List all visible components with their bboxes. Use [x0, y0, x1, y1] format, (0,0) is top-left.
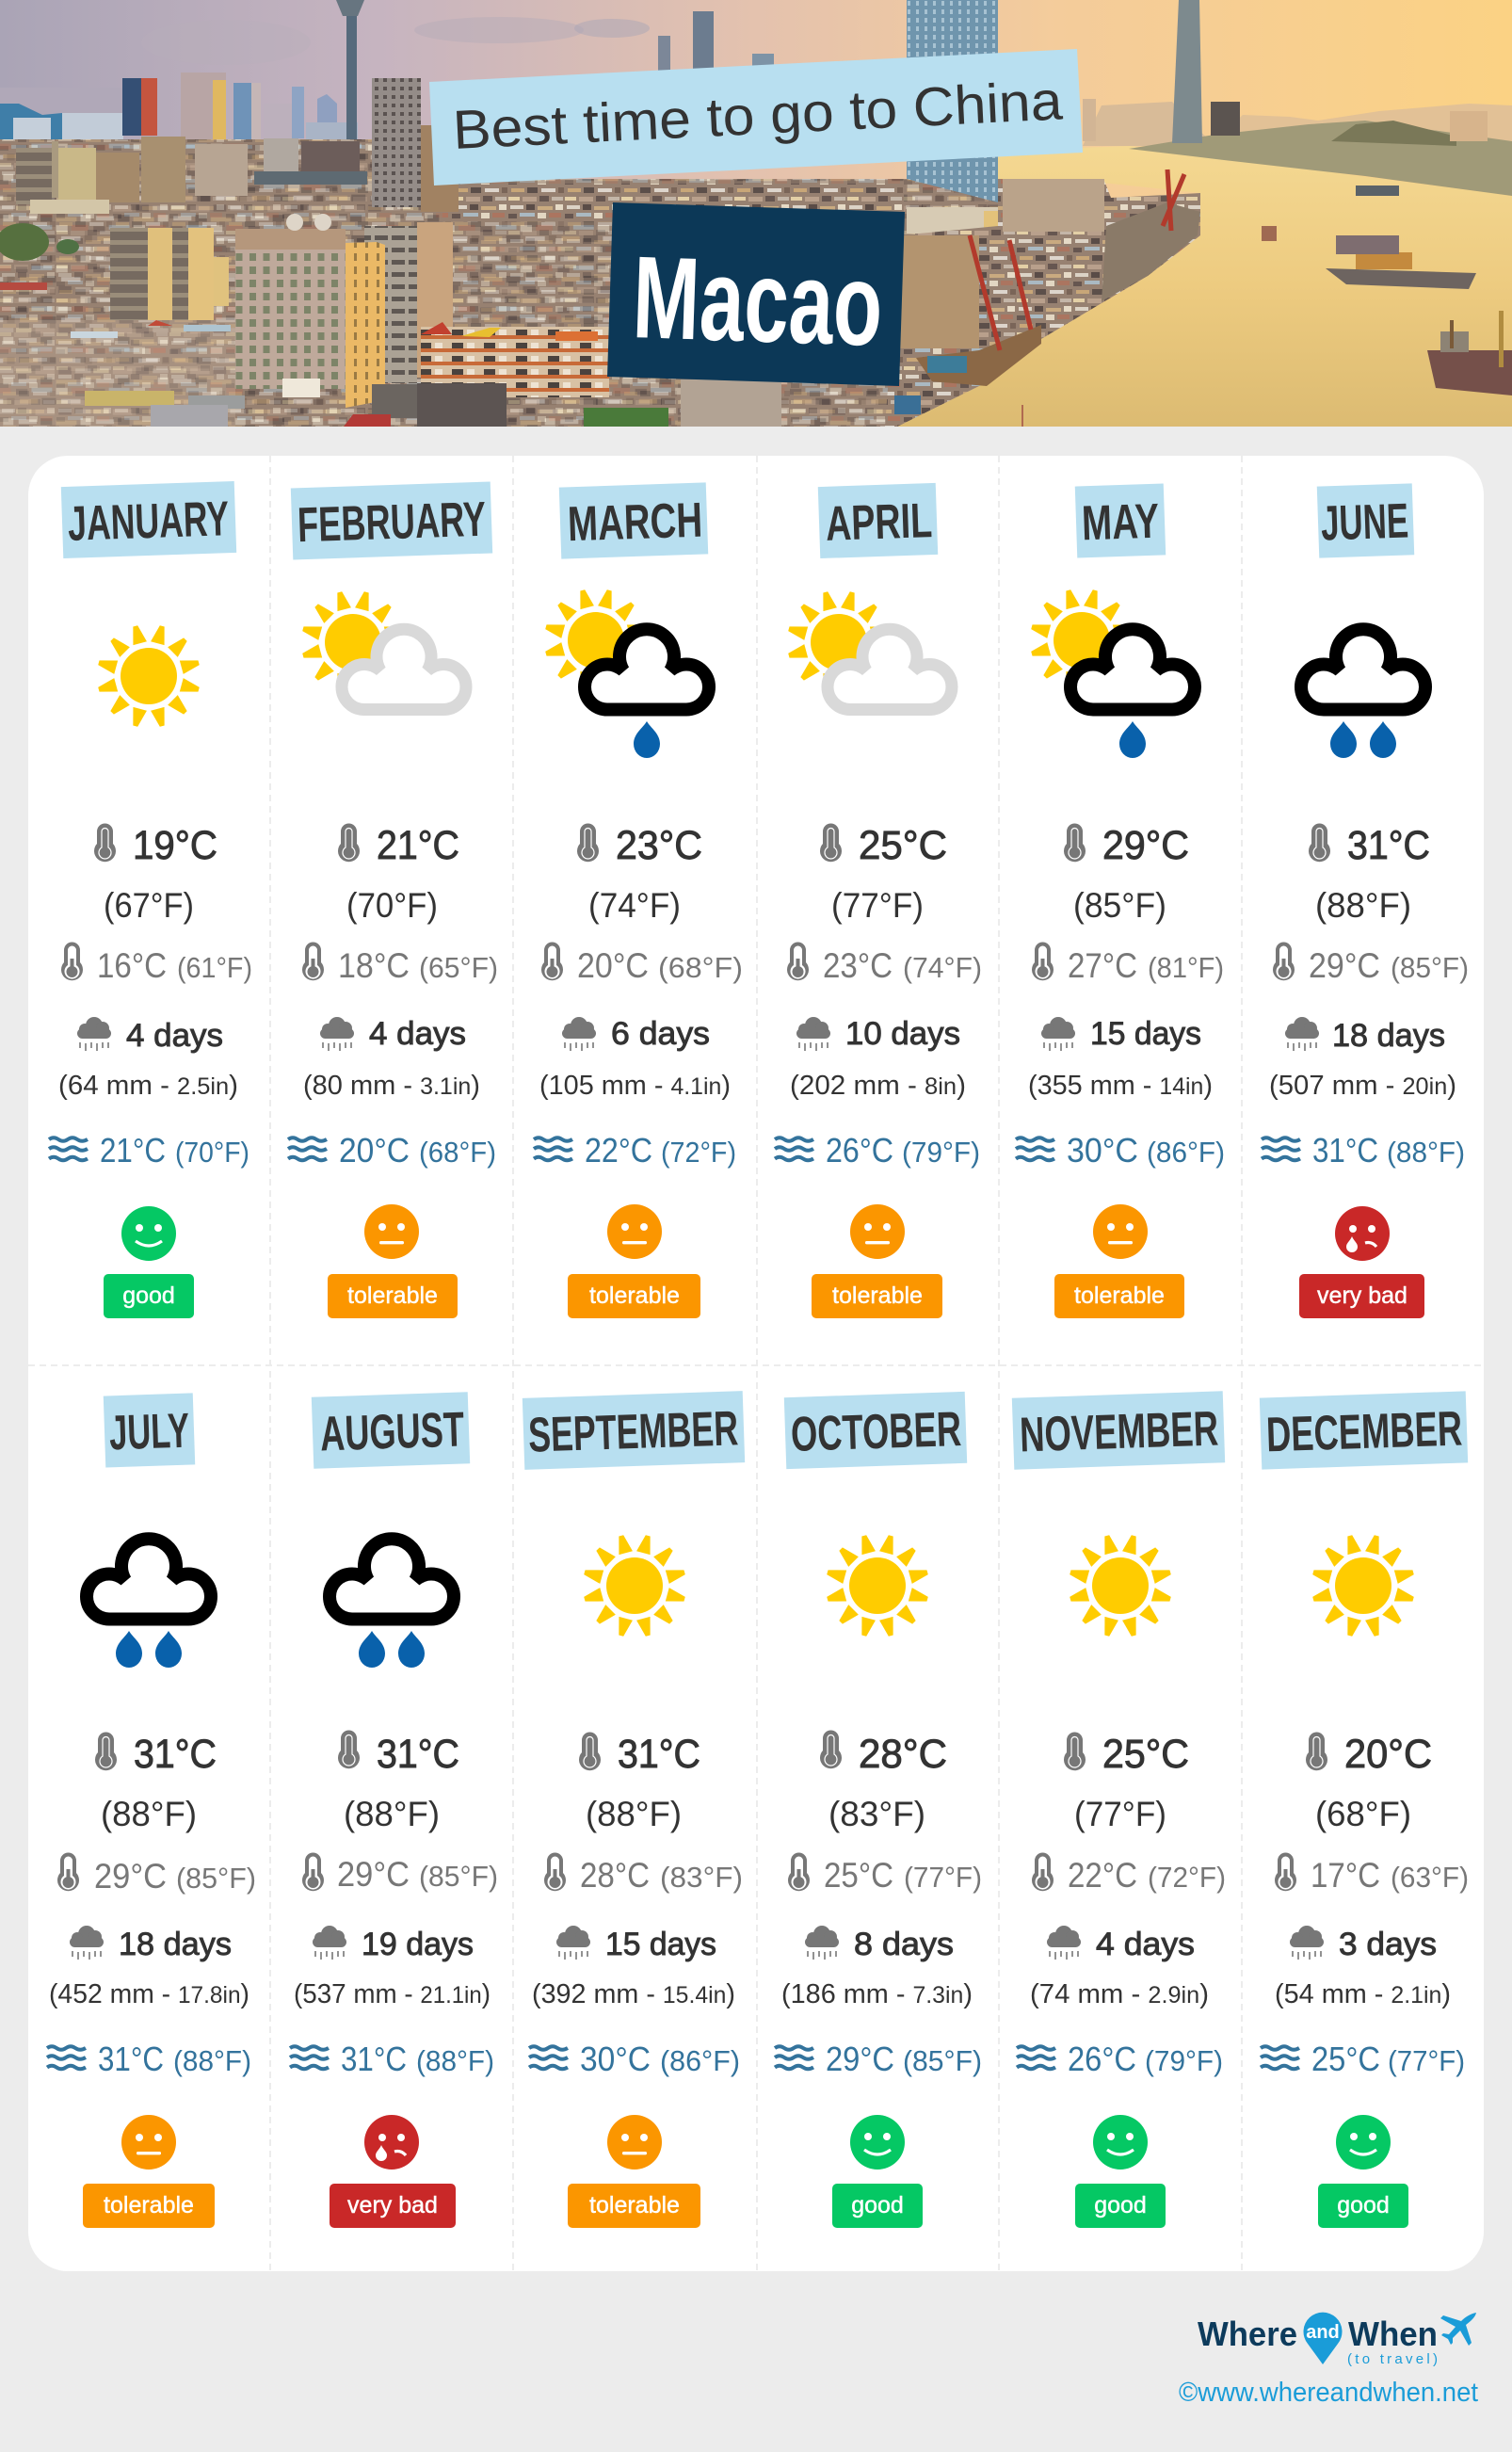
high temperature: 31°C [618, 1732, 700, 1777]
docks and boats on the near bank [885, 179, 1200, 427]
panel: August [290, 1392, 498, 2228]
rainfall: (54 mm - 2.1in) [1275, 1979, 1451, 2009]
sea temperature: (79°F) [1145, 2044, 1223, 2077]
rainy days [77, 1017, 223, 1054]
location banner: Macao [607, 202, 905, 386]
icon: black cloud, two drops [87, 1539, 211, 1668]
icon: sun [826, 1534, 929, 1637]
heading: JUNE [1317, 483, 1414, 558]
face: tolerable [1093, 1204, 1148, 1259]
high temperature: 31°C [377, 1732, 459, 1777]
rating badge: very bad: very bad [1317, 1282, 1407, 1309]
sea temperature: (88°F) [173, 2044, 251, 2077]
header photo: Macao skyline and river [0, 0, 1512, 427]
heading: SEPTEMBER: SEPTEMBER [527, 1401, 739, 1463]
rating badge: good: good [122, 1282, 175, 1309]
sea temperature: (88°F) [416, 2044, 494, 2077]
sea temperature: (70°F) [175, 1136, 249, 1169]
high temperature: 28°C [859, 1732, 947, 1777]
low temperature [1032, 942, 1224, 985]
rating badge: very bad [1299, 1274, 1424, 1318]
low temperature: 27°C [1068, 946, 1137, 985]
face: tolerable [364, 1204, 419, 1259]
high temperature [820, 1731, 947, 1777]
heading: MARCH: MARCH [567, 493, 703, 552]
face: good [1336, 2115, 1391, 2170]
face: good [1093, 2115, 1148, 2170]
city base [0, 139, 998, 427]
high temperature [820, 823, 947, 868]
sea temperature: 31°C [341, 2040, 407, 2078]
high temperature: 20°C [1344, 1732, 1432, 1777]
panel: May [1016, 483, 1225, 1318]
low temperature: (81°F) [1148, 951, 1224, 984]
low temperature: (61°F) [177, 951, 252, 984]
sea temperature: 25°C [1311, 2040, 1380, 2078]
heading: MAY [1075, 483, 1166, 558]
heading: OCTOBER [784, 1392, 967, 1469]
rainy days: 18 days [119, 1927, 232, 1962]
rainy days [320, 1016, 466, 1052]
sea temperature: 21°C [100, 1131, 166, 1170]
sea temperature: (79°F) [902, 1136, 980, 1169]
high temperature: 25°C [859, 823, 947, 868]
icon: black cloud, two drops [330, 1539, 454, 1668]
sea temperature: (68°F) [419, 1136, 496, 1169]
rainy days [556, 1926, 716, 1962]
low temperature [302, 942, 498, 985]
heading: NOVEMBER: NOVEMBER [1019, 1402, 1219, 1462]
high temperature Fahrenheit: (88°F) [344, 1795, 440, 1833]
low temperature: 23°C [823, 946, 893, 985]
heading: JULY [104, 1393, 195, 1468]
rainfall: (186 mm - 7.3in) [781, 1979, 973, 2009]
sea temperature: (85°F) [903, 2044, 982, 2077]
rating badge: tolerable: tolerable [832, 1282, 923, 1309]
high temperature: 23°C [616, 823, 702, 868]
low temperature [302, 1853, 498, 1894]
low temperature: 25°C [824, 1856, 893, 1895]
high temperature Fahrenheit: (77°F) [831, 886, 924, 925]
rainfall: (452 mm - 17.8in) [49, 1979, 249, 2009]
rating badge: good: good [851, 2192, 904, 2218]
sea temperature [534, 1131, 736, 1170]
rainy days [1047, 1926, 1195, 1962]
high temperature: 25°C [1102, 1732, 1189, 1777]
low temperature: 18°C [338, 946, 410, 985]
logo: Where and When (to travel) [1198, 2313, 1476, 2367]
high temperature: 19°C [133, 823, 217, 868]
heading: APRIL: APRIL [825, 493, 933, 552]
high temperature Fahrenheit: (85°F) [1073, 886, 1166, 925]
low temperature: 29°C [337, 1855, 410, 1894]
rating badge: good: good [1094, 2192, 1147, 2218]
sea temperature: (77°F) [1388, 2044, 1465, 2077]
high temperature Fahrenheit: (88°F) [101, 1795, 197, 1833]
high temperature [1064, 1732, 1189, 1777]
high temperature Fahrenheit: (77°F) [1074, 1795, 1166, 1833]
rating badge: tolerable [568, 2184, 700, 2228]
high temperature: 29°C [1102, 823, 1189, 868]
rating badge: tolerable [812, 1274, 942, 1318]
sea temperature: (72°F) [661, 1136, 736, 1169]
sea temperature [47, 2040, 251, 2078]
sea temperature: 30°C [580, 2040, 651, 2078]
low temperature: 22°C [1068, 1856, 1137, 1895]
rating badge: good [1318, 2184, 1408, 2228]
rainy days: 15 days [1090, 1016, 1201, 1052]
sea temperature: 20°C [339, 1131, 410, 1170]
sea temperature: 26°C [1068, 2040, 1136, 2078]
rainy days [1285, 1017, 1445, 1054]
panel: December [1260, 1391, 1469, 2228]
icon: plane [1440, 2313, 1476, 2346]
low temperature [1275, 1853, 1469, 1895]
high temperature Fahrenheit: (83°F) [828, 1795, 925, 1833]
rating badge: good: good [1337, 2192, 1390, 2218]
rating badge: tolerable [83, 2184, 215, 2228]
low temperature [544, 1853, 743, 1895]
high temperature [95, 1732, 217, 1777]
high temperature Fahrenheit: (68°F) [1315, 1795, 1411, 1833]
rainy days [70, 1926, 232, 1962]
rainy days [1041, 1016, 1201, 1052]
low temperature [787, 942, 982, 985]
icon: sun [1069, 1534, 1172, 1637]
heading: OCTOBER: OCTOBER [790, 1402, 962, 1462]
sea temperature [529, 2040, 740, 2078]
location banner: Macao: Macao [631, 233, 885, 371]
rainy days: 15 days [605, 1927, 716, 1962]
rainy days: 6 days [611, 1016, 710, 1052]
icon: sun [583, 1534, 686, 1637]
high temperature: 31°C [134, 1732, 217, 1777]
high temperature [577, 823, 702, 868]
sea temperature [49, 1131, 249, 1170]
panel: November [1012, 1391, 1226, 2228]
low temperature: (72°F) [1148, 1861, 1226, 1894]
low temperature [1032, 1853, 1226, 1895]
rainfall: (105 mm - 4.1in) [539, 1071, 731, 1101]
rainfall: (537 mm - 21.1in) [294, 1979, 491, 2009]
rating badge: tolerable: tolerable [347, 1282, 438, 1309]
face: tolerable [607, 1204, 662, 1259]
low temperature: (68°F) [658, 951, 743, 984]
high temperature [338, 823, 459, 868]
rating badge: tolerable: tolerable [589, 2192, 680, 2218]
low temperature: (85°F) [419, 1860, 498, 1893]
panel: March [534, 482, 743, 1318]
sea temperature: (86°F) [1147, 1136, 1225, 1169]
rainy days: 19 days [362, 1927, 474, 1962]
heading: MAY: MAY [1081, 494, 1160, 551]
website credit: ©www.whereandwhen.net [1179, 2378, 1478, 2408]
rating badge: tolerable [568, 1274, 700, 1318]
heading: FEBRUARY [291, 482, 492, 559]
high temperature Fahrenheit: (88°F) [586, 1795, 682, 1833]
face: very bad [364, 2115, 419, 2170]
high temperature Fahrenheit: (67°F) [104, 886, 194, 925]
sea temperature: 31°C [1312, 1131, 1378, 1170]
rating badge: tolerable: tolerable [1074, 1282, 1165, 1309]
high temperature Fahrenheit: (70°F) [346, 886, 438, 925]
high temperature Fahrenheit: (88°F) [1315, 886, 1411, 925]
rating badge: good [1075, 2184, 1166, 2228]
rainfall: (80 mm - 3.1in) [303, 1071, 480, 1101]
heading: SEPTEMBER [523, 1391, 745, 1470]
panel: June [1262, 483, 1469, 1318]
rating badge: tolerable [1054, 1274, 1184, 1318]
icon: sun, black cloud, one drop [1030, 589, 1195, 758]
low temperature: 20°C [577, 946, 649, 985]
panel: February [288, 482, 498, 1318]
rainfall: (202 mm - 8in) [790, 1071, 966, 1101]
calendar card [28, 456, 1484, 2271]
high temperature: 21°C [377, 823, 459, 868]
low temperature: (85°F) [1391, 951, 1469, 984]
heading: DECEMBER [1260, 1391, 1468, 1470]
sea temperature [288, 1131, 496, 1170]
high temperature [579, 1732, 700, 1777]
rating badge: very bad [330, 2184, 456, 2228]
sea temperature: (88°F) [1387, 1136, 1465, 1169]
heading: MARCH [559, 482, 708, 559]
rainy days: 4 days [369, 1016, 466, 1052]
heading: APRIL [818, 483, 938, 558]
heading: AUGUST: AUGUST [319, 1402, 465, 1461]
icon: map pin [1303, 2313, 1343, 2364]
logo: Where and When (to travel): (to travel) [1347, 2351, 1438, 2367]
sea temperature: (86°F) [660, 2044, 740, 2077]
rating badge: tolerable [328, 1274, 458, 1318]
rainy days [1290, 1926, 1437, 1962]
rating badge: good [832, 2184, 923, 2228]
low temperature: (85°F) [176, 1862, 256, 1895]
sea temperature [775, 2040, 982, 2078]
heading: NOVEMBER [1012, 1391, 1225, 1470]
rainfall: (507 mm - 20in) [1269, 1071, 1456, 1101]
face: good [121, 1206, 176, 1261]
heading: FEBRUARY: FEBRUARY [297, 492, 487, 553]
high temperature [94, 823, 217, 868]
heading: AUGUST [312, 1392, 470, 1469]
logo: Where and When (to travel): When [1348, 2315, 1438, 2353]
rainy days: 3 days [1339, 1927, 1437, 1962]
face: tolerable [607, 2115, 662, 2170]
low temperature: 28°C [580, 1856, 650, 1895]
rating badge: good [104, 1274, 194, 1318]
high temperature [1306, 1732, 1432, 1777]
sea temperature: 26°C [826, 1131, 893, 1170]
low temperature [541, 942, 743, 985]
icon: sun [1311, 1534, 1415, 1637]
low temperature [57, 1853, 256, 1895]
panel: April [775, 483, 982, 1318]
face: very bad [1335, 1206, 1390, 1261]
rainfall: (392 mm - 15.4in) [532, 1979, 735, 2009]
rainy days [805, 1926, 954, 1962]
low temperature: (65°F) [419, 951, 498, 984]
icon: sun and grey cloud [301, 590, 466, 710]
face: tolerable [121, 2115, 176, 2170]
rainy days: 4 days [1096, 1927, 1195, 1962]
rainy days: 18 days [1332, 1018, 1445, 1054]
high temperature Fahrenheit: (74°F) [588, 886, 681, 925]
heading: JUNE: JUNE [1320, 493, 1409, 552]
title banner [429, 49, 1083, 186]
low temperature: 16°C [97, 946, 167, 985]
heading: JULY: JULY [108, 1404, 190, 1460]
panel: January [49, 481, 252, 1318]
rainy days [796, 1016, 960, 1052]
rainfall: (355 mm - 14in) [1028, 1071, 1213, 1101]
panel: September [523, 1391, 745, 2228]
high temperature [338, 1731, 459, 1777]
icon: sun and grey cloud [787, 590, 952, 710]
icon: sun, black cloud, one drop [544, 589, 709, 758]
sea temperature [1016, 1131, 1225, 1170]
sea temperature: 22°C [585, 1131, 652, 1170]
sea temperature: 30°C [1067, 1131, 1138, 1170]
rating badge: very bad: very bad [347, 2192, 438, 2218]
low temperature: (63°F) [1391, 1861, 1469, 1894]
icon: map pin: and [1306, 2322, 1340, 2343]
rainy days: 4 days [126, 1018, 223, 1054]
low temperature [1273, 942, 1469, 985]
rainy days [562, 1016, 710, 1052]
face: tolerable [850, 1204, 905, 1259]
heading: JANUARY [61, 481, 236, 558]
heading: JANUARY: JANUARY [67, 492, 230, 552]
panel: October [775, 1392, 982, 2228]
rainy days: 10 days [845, 1016, 960, 1052]
rating badge: tolerable: tolerable [104, 2192, 194, 2218]
low temperature: (83°F) [660, 1861, 743, 1894]
rainy days: 8 days [854, 1927, 954, 1962]
sea temperature [775, 1131, 980, 1170]
low temperature: 29°C [94, 1857, 167, 1895]
face: good [850, 2115, 905, 2170]
boats on the river [1326, 268, 1476, 289]
rainfall: (74 mm - 2.9in) [1030, 1979, 1209, 2009]
low temperature: 29°C [1309, 946, 1380, 985]
rainy days [313, 1926, 474, 1962]
icon: black cloud, two drops [1301, 629, 1425, 758]
sea temperature [1261, 2040, 1465, 2078]
high temperature [1309, 823, 1430, 868]
panel: July [47, 1393, 256, 2228]
low temperature [61, 942, 252, 985]
low temperature: (74°F) [903, 951, 982, 984]
logo: Where and When (to travel): Where [1198, 2315, 1297, 2353]
title banner: Best time to go to China [451, 70, 1065, 161]
low temperature [788, 1853, 982, 1895]
sea temperature: 29°C [826, 2040, 894, 2078]
sea temperature [1262, 1131, 1465, 1170]
icon: sun [97, 624, 201, 728]
low temperature: (77°F) [904, 1861, 982, 1894]
sea temperature [290, 2040, 494, 2078]
sea temperature [1017, 2040, 1223, 2078]
high temperature [1064, 823, 1189, 868]
rating badge: tolerable: tolerable [589, 1282, 680, 1309]
high temperature: 31°C [1347, 823, 1430, 868]
low temperature: 17°C [1311, 1856, 1380, 1895]
rainfall: (64 mm - 2.5in) [58, 1071, 238, 1101]
sea temperature: 31°C [98, 2040, 164, 2078]
